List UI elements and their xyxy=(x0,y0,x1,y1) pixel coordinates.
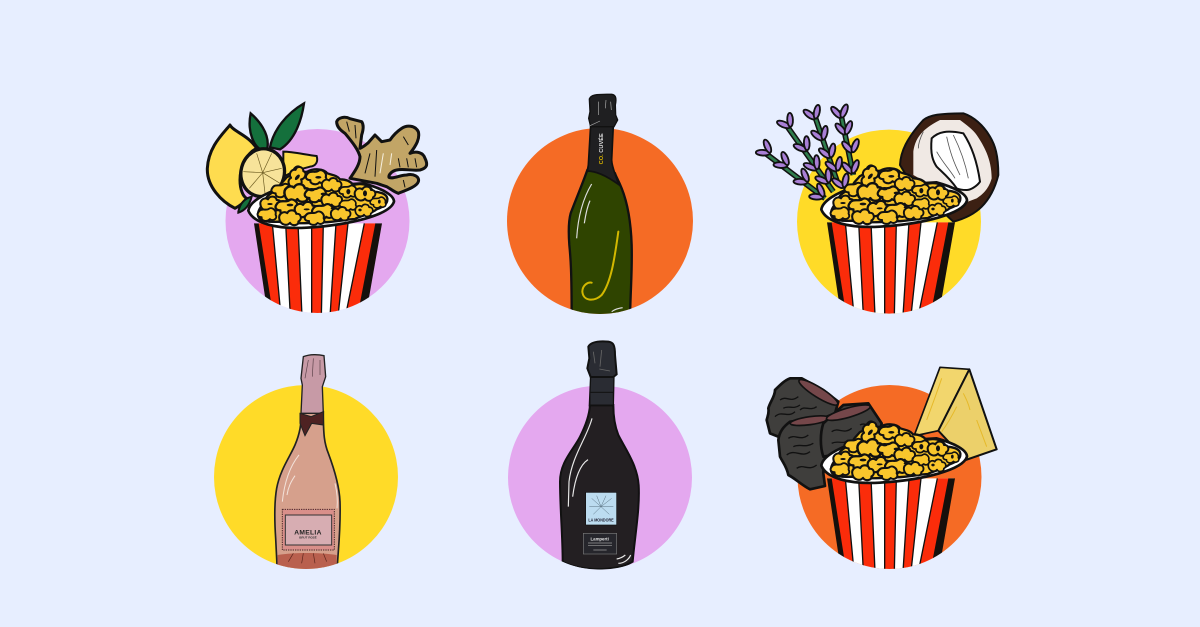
icon: ginger root xyxy=(337,117,427,193)
icon: cheese wedge xyxy=(914,367,997,460)
icon: whole lemon behind xyxy=(283,152,317,177)
foil neck xyxy=(589,375,614,406)
foil creases xyxy=(305,358,320,378)
icon: lavender sprigs xyxy=(753,103,862,206)
icon: prune two xyxy=(778,414,830,489)
lower label xyxy=(583,533,617,554)
orange circle xyxy=(507,128,693,314)
popcorn xyxy=(831,419,960,480)
bucket rim xyxy=(821,182,967,227)
glass highlights xyxy=(568,418,631,563)
lower label: Lamperti xyxy=(591,536,609,541)
cap highlights xyxy=(590,100,611,126)
popcorn xyxy=(258,164,387,225)
foil cap xyxy=(587,341,617,377)
icon: small leaf xyxy=(238,197,252,213)
glass xyxy=(569,170,632,318)
popcorn bucket with lavender and coconut xyxy=(753,103,998,316)
neck band xyxy=(300,412,323,436)
icon: prune three xyxy=(821,402,882,457)
foil neck xyxy=(587,125,618,184)
bottle xyxy=(275,355,340,578)
icon: leaf one xyxy=(250,113,268,149)
popcorn bucket with prunes and cheese xyxy=(767,367,997,572)
panel: black bottle xyxy=(508,341,692,570)
bucket rim xyxy=(821,438,967,483)
bottle xyxy=(560,341,639,569)
glass highlights xyxy=(282,455,337,508)
panel: green sparkling bottle xyxy=(507,94,693,318)
icon: leaf two xyxy=(270,103,304,149)
neck band xyxy=(590,392,613,405)
base lines xyxy=(288,553,327,563)
bottle base xyxy=(278,553,337,569)
label subtitle: BRUT ROSÉ xyxy=(299,534,317,539)
panel: lemon and ginger popcorn xyxy=(207,103,427,317)
yellow circle xyxy=(797,130,981,314)
icon: whole lemon xyxy=(207,125,257,208)
bottle xyxy=(569,94,632,318)
bucket body xyxy=(827,222,955,316)
pink circle xyxy=(508,386,692,570)
front label: LA MONDORE xyxy=(588,518,614,523)
foil cap xyxy=(589,94,618,127)
front label xyxy=(586,492,617,525)
glass xyxy=(275,412,340,578)
icon: coconut xyxy=(900,113,998,222)
cap highlights xyxy=(593,350,610,371)
glass highlights xyxy=(577,184,623,312)
icon: prune one xyxy=(767,376,840,440)
foil xyxy=(301,355,326,413)
bucket rim xyxy=(248,183,394,228)
label outer xyxy=(282,509,334,550)
label inner xyxy=(285,515,332,545)
icon: lemon slice xyxy=(236,144,290,201)
bucket body xyxy=(254,223,382,317)
pink circle xyxy=(226,129,410,313)
panel: rose bottle xyxy=(214,355,398,578)
popcorn xyxy=(831,163,960,224)
bucket body xyxy=(827,478,955,572)
popcorn bucket with lemon and ginger xyxy=(207,103,427,317)
yellow circle xyxy=(214,385,398,569)
orange circle xyxy=(798,385,982,569)
glass xyxy=(560,405,639,569)
label name: AMELIA xyxy=(294,529,322,536)
illustration canvas xyxy=(206,94,1000,570)
panel: prunes and cheese popcorn xyxy=(767,367,997,572)
neck label text: CO. CUVÉE xyxy=(597,133,605,164)
gold script J xyxy=(582,232,618,300)
panel: lavender and coconut popcorn xyxy=(753,103,998,316)
